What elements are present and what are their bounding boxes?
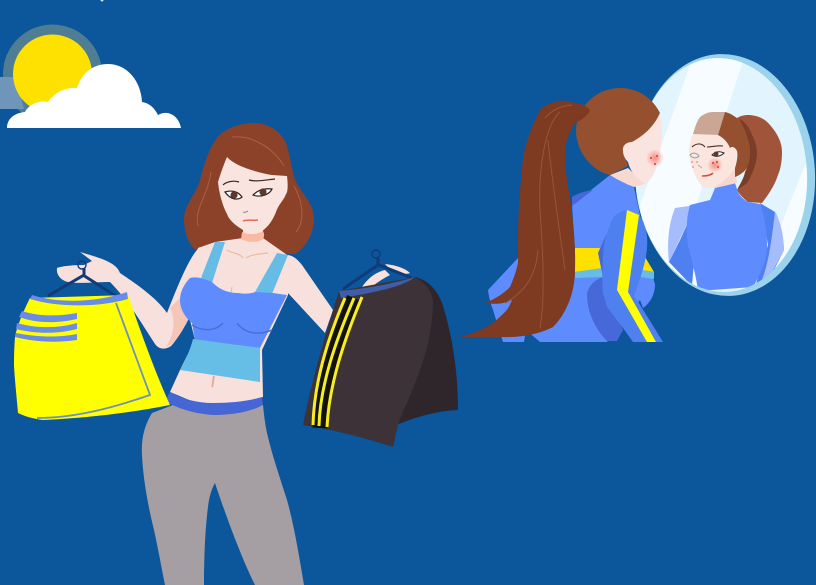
skirt waistband (339, 277, 415, 298)
hanger (48, 261, 117, 297)
ponytail strands (505, 105, 572, 328)
pants (142, 405, 304, 585)
arm yellow stripe (617, 210, 656, 342)
ponytail (460, 101, 590, 337)
body (488, 175, 655, 342)
arm (602, 210, 663, 342)
navel (212, 376, 214, 387)
hand behind hanger (362, 270, 390, 287)
reflection nose (698, 165, 702, 168)
icon: sun behind cloud (0, 24, 102, 124)
back hair (184, 123, 314, 254)
face (218, 157, 288, 234)
torso skin (170, 224, 290, 410)
pocket stripes (15, 311, 77, 342)
nose (243, 211, 248, 212)
blue bra top (180, 277, 287, 348)
skirt front panel (303, 277, 433, 447)
mirror (629, 49, 816, 301)
black skirt on hanger (303, 250, 458, 447)
belt trim (575, 268, 654, 279)
right arm (277, 253, 333, 333)
reflection mouth (702, 173, 713, 176)
decorative specks at the top edge (100, 0, 104, 2)
hair strands (197, 137, 302, 232)
light blue straps (201, 242, 288, 294)
reflection ponytail (737, 115, 782, 203)
skirt waistband (30, 292, 128, 305)
yellow belt (575, 248, 654, 272)
hip shadow (587, 233, 623, 341)
figure: woman from behind facing mirror (460, 88, 664, 342)
collarbones (227, 250, 268, 293)
eyebrows (223, 179, 275, 185)
cheek acne (646, 149, 664, 167)
right eye (253, 188, 272, 196)
mirror glass (629, 54, 813, 296)
seam line (37, 303, 150, 418)
yellow skirt on hanger (14, 261, 170, 420)
waistband (165, 392, 263, 415)
light blue midriff band (180, 339, 260, 382)
reflection hair front (693, 112, 725, 135)
left eye (225, 191, 242, 199)
face (623, 113, 662, 184)
mirror rim (629, 49, 816, 301)
skirt back panel (380, 277, 458, 424)
reflection arms (668, 203, 784, 286)
mouth (243, 220, 258, 221)
icon: white cloud (7, 64, 181, 128)
figure: woman holding two skirts (57, 123, 333, 585)
skirt body (14, 295, 170, 420)
upper back shadow (572, 190, 593, 206)
neck shadow (241, 231, 264, 242)
glass highlights (640, 58, 808, 287)
left arm and hand (57, 247, 212, 349)
reflection torso (687, 183, 767, 291)
neck (610, 168, 645, 187)
reflection neck (713, 168, 737, 188)
hanger (343, 250, 412, 289)
reflection acne (708, 158, 722, 172)
reflection face (689, 134, 737, 188)
reflection eyebrows and eyes (692, 144, 723, 147)
head hair (576, 88, 660, 175)
stripes (313, 297, 362, 428)
bra underlines (192, 323, 272, 333)
